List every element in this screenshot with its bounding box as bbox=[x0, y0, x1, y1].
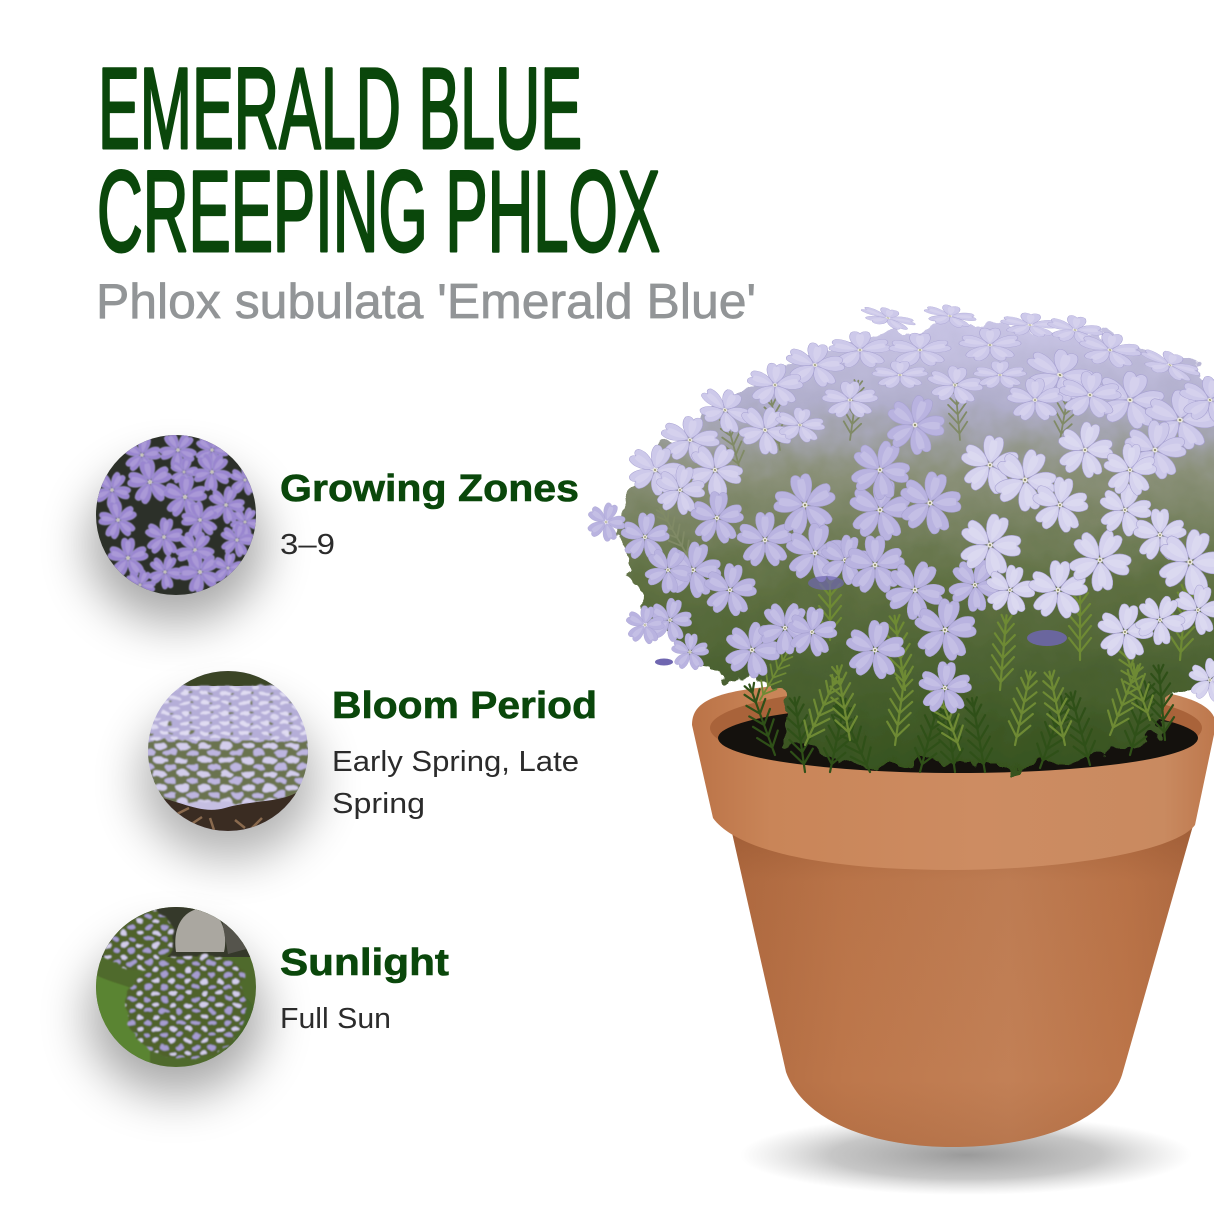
heading: growing zones: Growing Zones bbox=[280, 468, 579, 510]
title: EMERALD BLUE bbox=[98, 45, 582, 173]
icon: photo of purple phlox blooms close up bbox=[86, 423, 266, 623]
panel: growing zones bbox=[86, 423, 579, 623]
dark purple buds bbox=[655, 576, 1067, 666]
pot rim bbox=[692, 680, 1214, 870]
heading: sunlight: Sunlight bbox=[280, 942, 449, 984]
terracotta pot body bbox=[728, 815, 1196, 1147]
title bbox=[97, 45, 660, 276]
large flowers, left side bbox=[581, 387, 1012, 717]
plant foliage mound bbox=[610, 325, 1214, 777]
floor shadow bbox=[740, 1115, 1192, 1195]
subtitle: Phlox subulata 'Emerald Blue' bbox=[96, 275, 756, 329]
value: bloom period: Early Spring, Late bbox=[332, 746, 579, 778]
value: bloom period bbox=[332, 746, 579, 820]
panel: bloom period bbox=[130, 660, 597, 859]
upper dome of pale flowers bbox=[619, 301, 1214, 521]
title: CREEPING PHLOX bbox=[97, 148, 660, 276]
icon: photo of phlox mass planting bbox=[130, 660, 330, 859]
icon: photo of phlox by a rock in full sun bbox=[88, 906, 264, 1095]
panel: sunlight bbox=[88, 906, 449, 1095]
large flowers, right side bbox=[949, 416, 1214, 705]
heading: bloom period: Bloom Period bbox=[332, 685, 597, 727]
potted plant illustration bbox=[581, 301, 1214, 1195]
value: sunlight: Full Sun bbox=[280, 1003, 391, 1035]
value: bloom period: Spring bbox=[332, 788, 425, 820]
value: zones: 3–9 bbox=[280, 529, 335, 561]
